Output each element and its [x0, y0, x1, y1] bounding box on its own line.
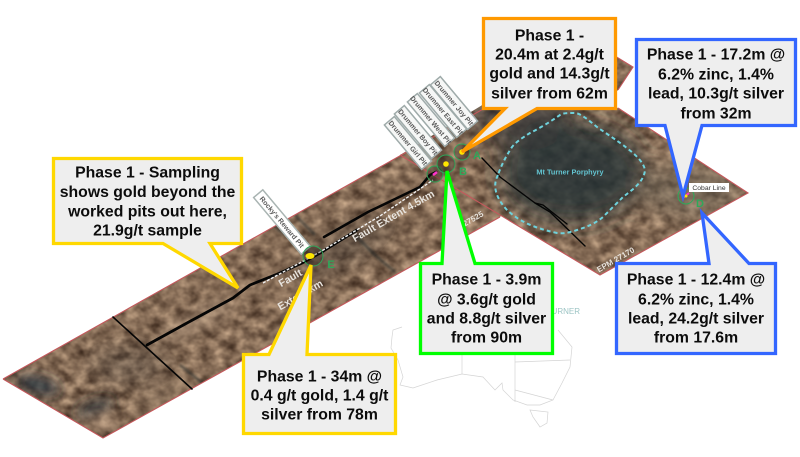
callout: Cobar upper result (blue): 6.2% zinc, 1.4% [658, 66, 774, 84]
marker cluster A and B: A [473, 150, 481, 162]
callout: Drummer Boy result (green): and 8.8g/t silver [427, 310, 546, 328]
pit tag: Drummer West Pit: Drummer West Pit [408, 95, 453, 147]
callout: Drummer Boy result (green): from 90m [451, 330, 522, 346]
marker cluster A and B [427, 144, 481, 182]
callout: Drummer Boy result (green): @ 3.6g/t gold [437, 292, 536, 308]
pit tag: Drummer Joy Pit: Drummer Joy Pit [433, 80, 474, 128]
label: EPM 27525: EPM 27525 [444, 209, 486, 238]
callout: Drummer Joy result (orange) [462, 18, 616, 152]
drainage channels [180, 210, 395, 385]
callout: Rocky's Reward result (yellow) [244, 265, 396, 434]
callout: Rocky's Reward result (yellow): 0.4 g/t gold, 1.4 g/t [251, 388, 389, 404]
callout: sampling (yellow) [54, 158, 242, 288]
callout: sampling (yellow): worked pits out here, [67, 204, 227, 220]
callout: Cobar lower result (blue) [616, 213, 776, 354]
marker D and Cobar Line [678, 183, 729, 210]
dashed fault extent line [263, 180, 433, 283]
porphyry outline [495, 113, 645, 233]
pit tag: Drummer East Pit: Drummer East Pit [421, 87, 464, 137]
pit tag: Drummer Girl Pit: Drummer Girl Pit [387, 120, 428, 168]
marker D and Cobar Line: Cobar Line [692, 185, 726, 192]
callout: Cobar lower result (blue): 6.2% zinc, 1.4% [638, 292, 754, 308]
callout: Drummer Joy result (orange): gold and 14.3g/t [489, 66, 610, 82]
callout: sampling (yellow): Phase 1 - Sampling [75, 164, 220, 182]
callout: Drummer Boy result (green): Phase 1 - 3.9m [432, 272, 541, 288]
pit tag: Drummer Boy Pit: Drummer Boy Pit [396, 108, 439, 157]
callout: Rocky's Reward result (yellow): silver from 78m [261, 406, 378, 424]
label: fault extent upper: Fault Extent 4.5km [350, 188, 437, 245]
callout: Cobar lower result (blue): Phase 1 - 12.4m @ [627, 272, 765, 288]
callout: sampling (yellow): 21.9g/t sample [93, 222, 202, 240]
pit tag: Rocky's Reward Pit: Rocky's Reward Pit [258, 196, 305, 250]
callout: Drummer Joy result (orange): silver from 62m [491, 86, 608, 102]
marker E: E [327, 259, 335, 271]
marker cluster A and B: B [459, 166, 467, 178]
callout: Drummer Boy result (green) [420, 171, 552, 354]
callout: Cobar upper result (blue) [636, 40, 796, 196]
locator label: MT TURNER [533, 307, 580, 316]
callout: sampling (yellow): shows gold beyond the [60, 184, 235, 201]
pit tag: Rocky's Reward Pit [254, 190, 310, 254]
fault lines [113, 158, 585, 389]
callout: Cobar lower result (blue): from 17.6m [654, 330, 738, 346]
callout: Drummer Joy result (orange): 20.4m at 2.4g/t [495, 46, 605, 64]
callout: Drummer Joy result (orange): Phase 1 - [515, 28, 584, 44]
label: Mt Turner Porphyry: Mt Turner Porphyry [536, 168, 605, 176]
callout: Cobar lower result (blue): lead, 24.2g/t silver [628, 310, 764, 328]
australia locator map [391, 307, 580, 427]
label: fault extent lower: Extent km [276, 278, 325, 313]
callout: Cobar upper result (blue): lead, 10.3g/t silver [648, 86, 784, 102]
label: fault extent lower: Fault [277, 267, 305, 290]
label: EPM 27170: EPM 27170 [595, 245, 637, 274]
callout: Cobar upper result (blue): Phase 1 - 17.2m @ [647, 46, 785, 64]
callout: Rocky's Reward result (yellow): Phase 1 - 34m @ [257, 368, 382, 386]
callout: Cobar upper result (blue): from 32m [680, 106, 752, 122]
marker D and Cobar Line: D [696, 198, 704, 210]
marker E [303, 246, 335, 271]
